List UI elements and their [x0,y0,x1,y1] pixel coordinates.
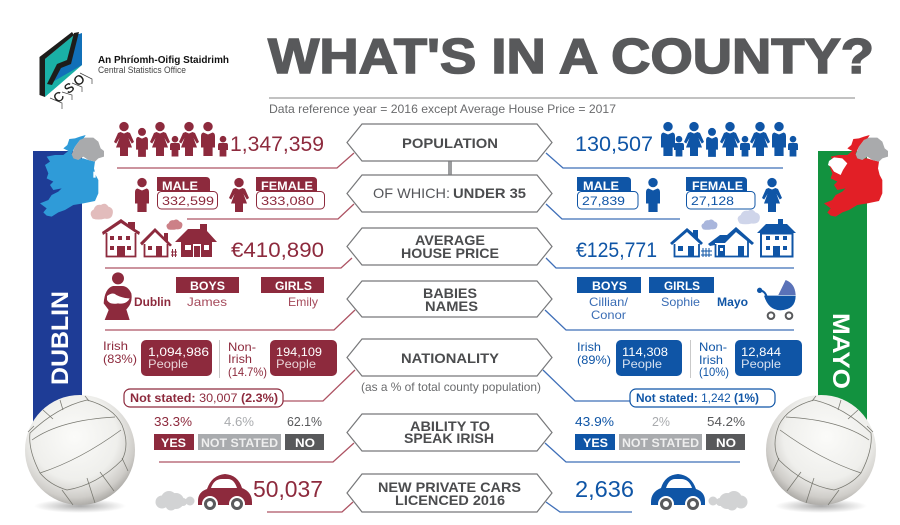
panel: Dublin under 35 [135,177,324,212]
panel: Mayo banner: MAYO [827,313,854,389]
logo: Central Statistics Office: An Phríomh-Oifig Staidrimh [98,55,229,66]
panel: Mayo banner [818,151,867,426]
panel: Mayo nationality: People [741,357,781,371]
label: average house price: HOUSE PRICE [401,245,499,261]
logo: Central Statistics Office: C [50,88,67,106]
panel: Mayo nationality: Non- [699,340,727,354]
panel: Mayo nationality: (10%) [699,365,729,379]
panel: Dublin nationality: 1,094,986 [148,345,209,359]
panel: Dublin ability to speak Irish: NO [295,436,315,450]
label: babies names: BABIES [423,285,477,301]
icon: pram [757,280,796,319]
panel: Dublin population: 1,347,359 [230,133,324,156]
panel: Dublin baby names: Dublin [134,295,171,309]
label: babies names: NAMES [425,298,478,314]
panel: Dublin under 35: MALE [162,179,198,193]
data reference note: Data reference year = 2016 except Average House Price = 2017 [269,102,616,116]
panel: Dublin nationality [103,339,337,407]
panel: Dublin nationality: (83%) [103,352,137,366]
panel: Mayo under 35: FEMALE [692,179,743,193]
panel: Mayo nationality: (89%) [577,353,611,367]
panel: Mayo baby names: Cillian/ [589,295,629,309]
panel: Mayo nationality [577,340,802,407]
panel: Mayo house price: €125,771 [576,239,657,262]
panel: Dublin baby names: BOYS [190,279,225,293]
panel: Dublin population [114,122,324,157]
panel: Mayo ability to speak Irish: 43.9% [575,415,614,429]
panel: Dublin new cars [156,474,323,512]
panel: Dublin baby names: Emily [288,295,318,309]
logo: Central Statistics Office: Central Statistics Office [98,65,186,75]
label: population [347,124,552,161]
panel: Dublin house price: €410,890 [231,239,324,262]
label: average house price [347,228,552,265]
label: new private cars: LICENCED 2016 [395,492,505,508]
panel: Dublin ability to speak Irish: 33.3% [154,415,192,429]
panel: Dublin nationality: Not stated: 30,007 (2.3%) [130,391,278,405]
panel: Mayo ability to speak Irish: 54.2% [707,415,745,429]
panel: Dublin ability to speak Irish: 62.1% [287,415,322,429]
panel: Dublin nationality: (14.7%) [228,365,267,379]
panel: Mayo baby names: Sophie [661,295,700,309]
label: of which under 35: UNDER 35 [453,185,526,201]
icon: mother and baby [104,272,132,320]
panel: Mayo ability to speak Irish: 2% [652,415,670,429]
panel: Mayo population: 130,507 [575,133,653,156]
panel: Mayo ability to speak Irish [575,415,745,450]
connector between population and under 35 [448,161,452,175]
panel: Dublin banner: DUBLIN [47,291,74,385]
panel: Mayo population [575,122,798,157]
label: of which under 35 [347,175,552,212]
label: of which under 35: OF WHICH: [373,185,450,201]
label: new private cars [347,474,552,512]
panel: Mayo nationality: Not stated: 1,242 (1%) [636,391,759,405]
panel: Mayo nationality: Irish [577,340,601,354]
panel: Mayo baby names [577,277,796,322]
panel: Dublin nationality: People [148,357,188,371]
panel: Mayo nationality: 114,308 [622,345,668,359]
label: nationality: NATIONALITY [401,350,500,366]
panel: Dublin ability to speak Irish [154,415,324,450]
map: Ireland highlighting Dublin [40,135,104,217]
panel: Mayo new cars [575,474,748,512]
panel: Mayo nationality: People [622,357,662,371]
panel: Mayo baby names: Conor [591,308,626,322]
panel: Dublin new cars: 50,037 [253,476,323,502]
panel: Dublin nationality: People [276,357,316,371]
panel: Mayo under 35: 27,839 [582,194,625,208]
logo: Central Statistics Office: O [70,71,88,89]
note: as a percentage of total county population: (as a % of total county population) [361,380,541,394]
panel: Dublin baby names: James [187,295,227,309]
panel: Mayo ability to speak Irish: NOT STATED [622,436,699,450]
label: nationality [347,339,552,376]
panel: Mayo new cars: 2,636 [575,476,634,502]
panel: Mayo baby names: GIRLS [664,279,700,293]
panel: Mayo under 35: MALE [583,179,619,193]
panel: Mayo under 35 [577,177,782,212]
logo: Central Statistics Office: S [61,79,77,97]
panel: Dublin baby names [104,272,324,320]
panel: Dublin nationality: Irish [103,339,128,353]
panel: Mayo under 35: 27,128 [691,194,734,208]
panel: Dublin ability to speak Irish: 4.6% [224,415,254,429]
panel: Dublin under 35: 333,080 [261,194,314,208]
panel: Dublin ability to speak Irish: NOT STATED [201,436,278,450]
panel: Mayo nationality: 12,844 [741,345,781,359]
label: average house price: AVERAGE [415,232,485,248]
panel: Mayo ability to speak Irish: NO [716,436,736,450]
label: new private cars: NEW PRIVATE CARS [378,479,521,495]
panel: Dublin nationality: Non- [228,340,256,354]
panel: Dublin banner [33,151,82,426]
panel: Dublin nationality: Irish [228,352,252,366]
title: WHAT'S IN A COUNTY? [268,30,874,84]
panel: Mayo house price [576,210,796,262]
panel: Mayo nationality: Irish [699,353,723,367]
football: Dublin [25,395,135,513]
panel: Dublin under 35: FEMALE [261,179,313,193]
label: population: POPULATION [402,135,498,151]
panel: Dublin house price [91,204,324,262]
panel: Dublin nationality: 194,109 [276,345,322,359]
row lines: Dublin [105,153,355,512]
panel: Mayo baby names: Mayo [717,295,748,309]
label: ability to speak Irish: ABILITY TO [410,418,490,434]
panel: Dublin baby names: GIRLS [275,279,312,293]
label: ability to speak Irish [347,414,552,451]
row lines: Mayo [543,153,794,512]
football: Mayo [766,395,876,513]
panel: Dublin ability to speak Irish: YES [161,436,186,450]
map: Ireland highlighting Mayo [824,135,888,217]
logo: Central Statistics Office [40,32,229,109]
label: babies names [347,281,552,317]
panel: Mayo ability to speak Irish: YES [583,436,608,450]
label: ability to speak Irish: SPEAK IRISH [404,430,494,446]
panel: Mayo baby names: BOYS [592,279,627,293]
panel: Dublin under 35: 332,599 [162,194,214,208]
